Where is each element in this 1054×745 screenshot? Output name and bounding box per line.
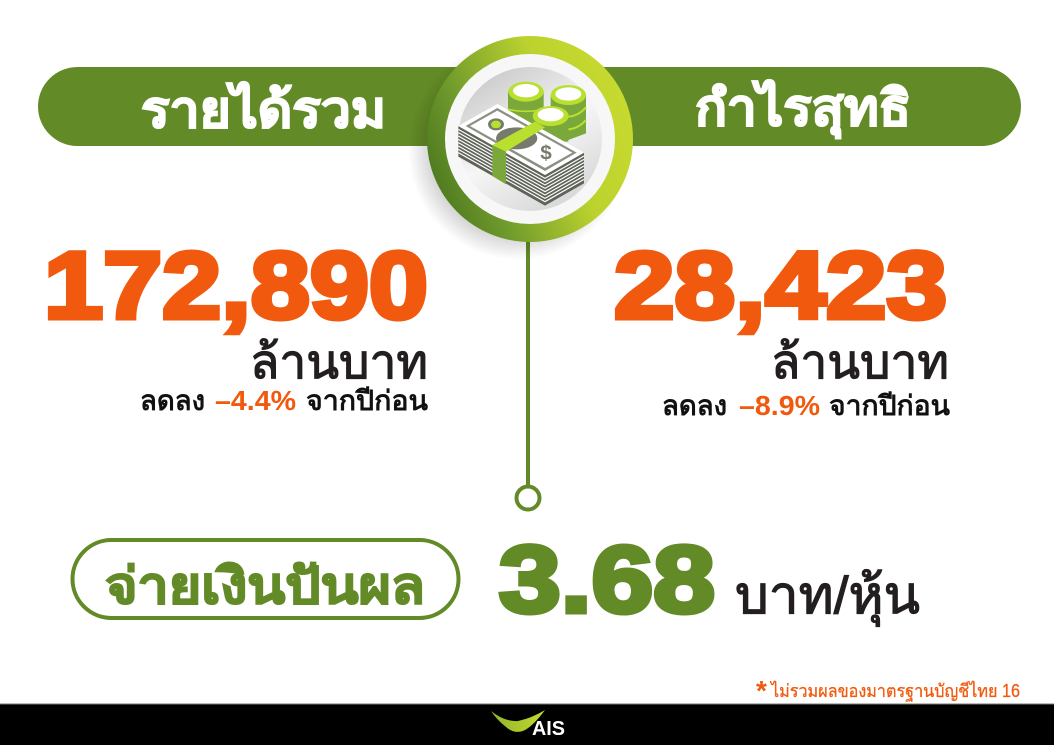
revenue value: 172,890 (44, 233, 428, 339)
revenue unit: ล้านบาท (250, 335, 428, 388)
AIS logo mark (491, 710, 545, 732)
revenue change: ลดลง (140, 385, 205, 416)
footer bar (0, 704, 1054, 745)
profit change: จากปีก่อน (829, 390, 950, 421)
footnote (756, 675, 1020, 706)
bill stack sides (458, 126, 584, 206)
profit change (662, 390, 950, 421)
dividend pill: จ่ายเงินปันผล (105, 558, 425, 614)
revenue change: –4.4% (215, 385, 296, 416)
heading: net profit: กำไรสุทธิ (695, 79, 911, 139)
coin stack front (533, 106, 569, 142)
footnote: ไม่รวมผลของมาตรฐานบัญชีไทย 16 (769, 680, 1020, 702)
paper band (492, 122, 545, 184)
profit change: ลดลง (662, 390, 727, 421)
profit unit: ล้านบาท (771, 335, 949, 388)
vertical connector line (526, 236, 530, 488)
connector end circle (516, 486, 540, 510)
bill top face (458, 104, 584, 175)
dividend value: 3.68 (499, 527, 715, 633)
money icon medallion (408, 36, 633, 260)
dividend pill (72, 540, 458, 618)
header bar: left and right (38, 67, 1021, 146)
footnote: * (756, 675, 767, 706)
AIS logo text: AIS (532, 718, 565, 740)
coin stack back right (551, 85, 586, 140)
dividend unit: บาท/หุ้น (735, 567, 920, 627)
heading: total revenue: รายได้รวม (141, 81, 386, 138)
dollar sign: $ (540, 141, 552, 164)
coin stack back left (508, 82, 544, 130)
profit value: 28,423 (614, 233, 947, 339)
revenue change: จากปีก่อน (306, 385, 428, 416)
icon: money stack and coins (458, 82, 586, 206)
revenue change (140, 385, 428, 416)
profit change: –8.9% (739, 390, 820, 421)
